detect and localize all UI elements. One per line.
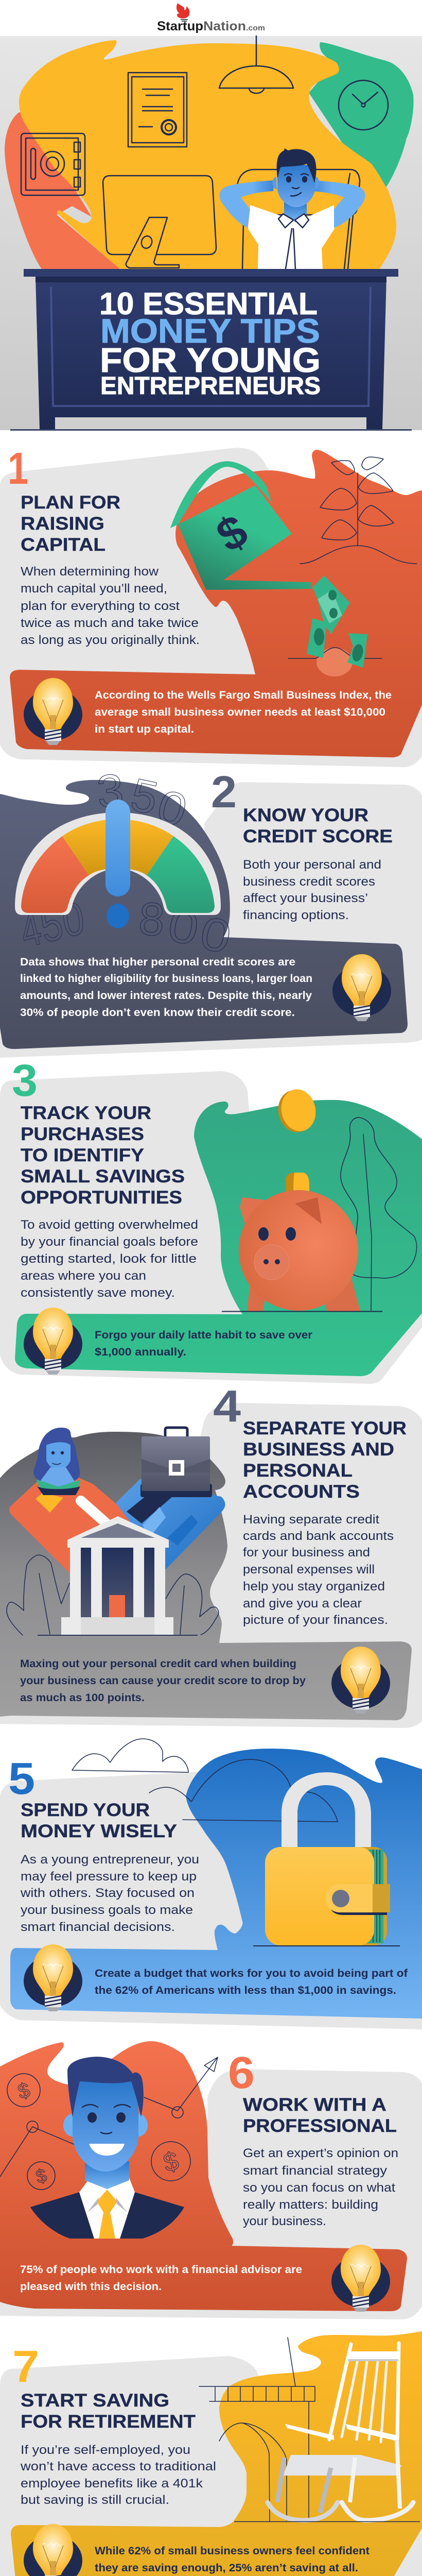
body text: and give you a clear [243,1597,362,1611]
body text: When determining how [21,565,159,579]
callout: Forgo your daily latte habit to save over [95,1329,312,1341]
callout: Maxing out your personal credit card when building [20,1658,296,1670]
icon: lightbulb [331,2245,390,2312]
dark blob and callout [0,780,408,1049]
gauge number labels: 0 [59,893,87,947]
body text: much capital you’ll need, [21,582,167,596]
heading: TRACK YOUR [21,1103,151,1123]
icon: credit card orange [9,1467,160,1573]
face [46,1442,71,1469]
arms [285,2424,397,2441]
hair [67,2057,144,2117]
gauge number labels: 0 [151,780,192,837]
ground line [38,1635,198,1636]
icon: piggy bank [239,1190,360,1311]
title: 10 ESSENTIAL [99,286,318,321]
heading: SEPARATE YOUR [243,1418,407,1438]
callout [95,1968,408,1996]
icon: card stripe [81,1501,108,1524]
heading: WORK WITH A [243,2095,386,2115]
callout: average small business owner needs at least $10,000 [95,706,385,718]
heading: SMALL SAVINGS [21,1166,185,1187]
panel: tip 1 plan for raising capital [0,444,422,767]
desk body [36,277,386,429]
callout [95,689,392,735]
right arm [310,180,365,228]
heading: KNOW YOUR [243,805,368,825]
steps [81,1617,154,1635]
heading [243,805,393,846]
facial features [285,174,308,196]
panel background [0,448,422,767]
icon: wallet [265,1847,390,1945]
body text: Get an expert’s opinion on [243,2146,398,2160]
logo text: .com [246,24,265,32]
heading [21,493,120,555]
logo: StartupNation top [157,3,265,33]
icon: watering can [170,461,311,590]
body text: areas where you can [21,1269,146,1283]
dark collar [37,1486,80,1495]
callout: they are saving enough, 25% aren’t saving at all. [95,2562,358,2574]
outline hill [149,1759,338,1822]
title: ENTREPRENEURS [100,372,321,400]
body text: If you’re self-employed, you [21,2443,190,2457]
title: FOR YOUNG [100,341,321,380]
snout [254,1245,289,1280]
panel: tip 2 know your credit score [0,765,422,1058]
neck [284,202,307,223]
chair [237,170,360,269]
number 7: 7 [12,2342,39,2392]
desk top [24,269,398,277]
hair [33,1428,80,1483]
body text: financing options. [243,908,349,922]
logo text: Startup [157,19,203,33]
callout: 75% of people who work with a financial advisor are [20,2264,302,2276]
body text: Both your personal and [243,858,381,872]
cloud outline [72,1739,188,1772]
icon: falling bills [307,575,367,668]
heading: BUSINESS AND [243,1439,394,1460]
body text: Having separate credit [243,1513,379,1527]
icon: blue credit card [116,1479,225,1569]
icon: tree outline [341,1117,417,1311]
body text: your business goals to make [21,1903,193,1917]
desk gap [55,417,366,430]
body text: plan for everything to cost [21,599,180,613]
callout: your business can cause your credit score to drop by [20,1675,306,1687]
heading [243,1418,407,1502]
blob: orange [5,112,120,269]
legs [277,2458,331,2513]
icon: coin in slot [286,1173,309,1196]
tie [97,2190,117,2239]
panel: tip 6 work with a professional [0,2041,422,2319]
floor line [10,429,412,431]
eyes and mouth [51,1452,64,1464]
body text [21,1218,198,1300]
desk front panel frame [51,287,371,406]
character: woman [33,1428,81,1495]
callout: pleased with this decision. [20,2281,162,2293]
ground line [222,1311,382,1312]
callout: Data shows that higher personal credit scores are [20,956,295,968]
icon: growth chart and dollar coins: $ [161,2146,182,2178]
body text: As a young entrepreneur, you [21,1853,199,1867]
callout: $1,000 annually. [95,1346,186,1358]
body text: as long as you originally think. [21,633,200,647]
body text: twice as much and take twice [21,616,199,630]
body text [20,2443,216,2507]
callout: as much as 100 points. [20,1692,145,1704]
logo text: Nation [203,19,246,33]
gauge number labels [15,765,236,964]
body text: so you can focus on what [243,2181,395,2195]
brows and nose [82,2105,130,2134]
callout: linked to higher eligibility for business loans, larger loan [20,973,312,985]
heading: CAPITAL [21,535,106,555]
face [73,2081,138,2172]
body text: cards and bank accounts [243,1529,394,1543]
yellow blob and callout [11,2331,422,2576]
gauge number labels: 5 [36,898,67,953]
rear posts and slats [329,2343,399,2442]
body text [243,1513,394,1627]
icon: certificate [128,73,187,147]
suit right [120,2192,184,2239]
column bases [61,1617,173,1635]
heading: CREDIT SCORE [243,826,393,846]
panel background [0,2356,422,2576]
panel background [0,1403,422,1728]
icon: growth chart and dollar coins: $ [33,2164,49,2188]
callout: the 62% of Americans with less than $1,000 in savings. [95,1985,396,1996]
icon: watering can: $ [208,505,256,563]
panel background [0,1771,422,2029]
exclamation bar [106,800,130,896]
body text [243,2146,398,2228]
body text: help you stay organized [243,1580,385,1594]
body text: by your financial goals before [21,1235,198,1249]
icon: growth chart and dollar coins: $ [15,2079,32,2104]
blob: green [309,42,414,188]
heading: ACCOUNTS [243,1482,360,1502]
collar shadows [87,2197,127,2212]
title [99,286,321,400]
callout [20,2264,302,2293]
body text: but saving is still crucial. [21,2493,169,2507]
body text: affect your business’ [243,891,368,905]
body text: getting started, look for little [21,1252,197,1266]
shirt [79,2178,135,2239]
heading [21,1103,185,1208]
heading: SPEND YOUR [21,1800,150,1820]
heading: PLAN FOR [21,493,120,513]
hair [277,148,316,183]
callout: Create a budget that works for you to avoid being part of [95,1968,408,1979]
callout: amounts, and lower interest rates. Despite this, nearly [20,990,312,1002]
suit left [30,2192,94,2239]
icon: wall clock [339,80,388,130]
exclamation dot [107,904,129,928]
callout [95,2545,370,2574]
icon: padlock shackle [282,1772,371,1855]
gauge number labels: 0 [196,907,236,964]
heading: FOR RETIREMENT [21,2412,196,2432]
heading: PROFESSIONAL [243,2116,397,2136]
heading [243,2095,397,2136]
panel background [0,782,422,1058]
body text: your business. [243,2214,326,2228]
seat [283,2455,401,2476]
body text [243,858,381,922]
orange blob and callout [10,450,422,757]
icon: bank building [61,1516,173,1635]
icon: safe [21,133,85,195]
icon: lightbulb [332,954,391,1021]
body text: smart financial strategy [243,2164,387,2178]
ground line [253,1945,400,1946]
callout: 30% of people don’t even know their credit score. [20,1007,295,1019]
blob: yellow [19,40,396,269]
body text: employee benefits like a 401k [21,2477,203,2490]
icon: shelf and plant outline [199,2337,315,2521]
neck [85,2161,129,2189]
door [109,1595,125,1617]
panel: hero office scene [0,36,422,430]
gauge low segment [21,836,89,913]
body [239,1190,358,1311]
number 6: 6 [228,2048,255,2098]
body text: business credit scores [243,875,375,889]
face [277,165,315,207]
gauge number labels: 3 [95,765,126,818]
body text: To avoid getting overwhelmed [21,1218,198,1232]
green collar [37,1480,81,1490]
body text: picture of your finances. [243,1613,388,1627]
panel: tip 7 start saving for retirement [0,2331,422,2576]
icon: flame [177,3,189,19]
icon: lightbulb [24,1944,82,2011]
ground line [234,2521,420,2522]
icon: growth chart and dollar coins [0,2057,218,2190]
heading: MONEY WISELY [21,1821,177,1841]
top rail [348,2351,398,2359]
heading [21,1800,177,1841]
body text: for your business and [243,1546,370,1560]
icon: pendant lamp [219,36,293,93]
panel: tip 3 track your purchases [0,1056,422,1384]
body text: may feel pressure to keep up [21,1870,197,1884]
green blob and callout [15,1100,422,1376]
left arm [220,180,274,228]
gauge number labels: 0 [164,900,202,956]
number 4: 4 [213,1381,241,1431]
orange blob and callout [0,2041,407,2311]
heading: OPPORTUNITIES [21,1188,182,1208]
gauge frame [15,812,221,915]
ears [63,2114,148,2137]
character: advisor [30,2057,184,2239]
icon: briefcase [140,1428,212,1497]
neck and chest [40,1467,75,1492]
eyes [87,2112,126,2123]
rockers [268,2502,338,2520]
callout [20,956,312,1019]
title: MONEY TIPS [100,312,320,350]
legs [247,1273,360,1311]
number 5: 5 [8,1754,35,1804]
heading: PERSONAL [243,1461,353,1481]
ground line [288,648,382,658]
nostrils [263,1259,280,1264]
gray blob and callout [0,1432,412,1720]
panel: tip 4 separate accounts [0,1381,422,1728]
callout: While 62% of small business owners feel confident [95,2545,370,2557]
icon: rocking chair [268,2343,413,2520]
callout [95,1329,312,1358]
icon: ground mound glow [316,648,353,676]
chart: credit score gauge [15,800,221,928]
number 2: 2 [211,767,237,817]
smile [89,2144,125,2156]
callout: According to the Wells Fargo Small Business Index, the [95,689,392,701]
icon: lightbulb [331,1647,390,1714]
icon: falling coin [274,1086,320,1136]
icon: plant outlines [7,1555,219,1635]
callout [20,1658,306,1704]
eyes [258,1227,296,1241]
ears [272,177,320,189]
shirt [248,205,335,269]
heading: TO IDENTIFY [21,1145,144,1165]
icon: plant [300,457,417,564]
gauge mid segment [62,819,173,875]
ear [240,1197,268,1231]
heading [21,2391,196,2432]
desk shadow [36,277,386,282]
panel background [0,2069,422,2319]
body text [21,565,200,647]
character: man relaxing at desk [220,148,365,269]
gauge number labels: 4 [15,903,47,958]
icon: lightbulb [24,678,82,745]
icon: lightbulb [24,2524,82,2576]
icon: torch base [181,20,188,21]
number 1: 1 [8,444,28,494]
heading: PURCHASES [21,1124,144,1144]
body text: smart financial decisions. [21,1920,175,1934]
icon: computer monitor [103,176,216,268]
icon: lightbulb [24,1308,82,1375]
body text: won’t have access to traditional [20,2460,216,2473]
callout: in start up capital. [95,723,194,735]
icon: card chip [36,1493,63,1513]
gauge number labels: 8 [137,893,166,946]
panel: tip 5 spend your money wisely [0,1739,422,2029]
gauge high segment [147,836,215,913]
ear right [295,1197,322,1224]
number 3: 3 [12,1056,38,1106]
columns [70,1548,165,1617]
blue blob and callout [10,1749,422,2019]
hero background [0,36,422,430]
heading: RAISING [21,514,104,534]
gauge number labels: 5 [127,769,162,825]
panel background [0,1071,422,1384]
heading: START SAVING [21,2391,169,2411]
body text: personal expenses will [243,1563,375,1577]
interior [70,1548,165,1617]
body text [20,1853,199,1934]
collar and tie [278,214,309,269]
body text: with others. Stay focused on [20,1886,195,1900]
pediment [67,1516,169,1548]
body text: really matters: building [243,2198,378,2212]
body text: consistently save money. [21,1286,175,1300]
